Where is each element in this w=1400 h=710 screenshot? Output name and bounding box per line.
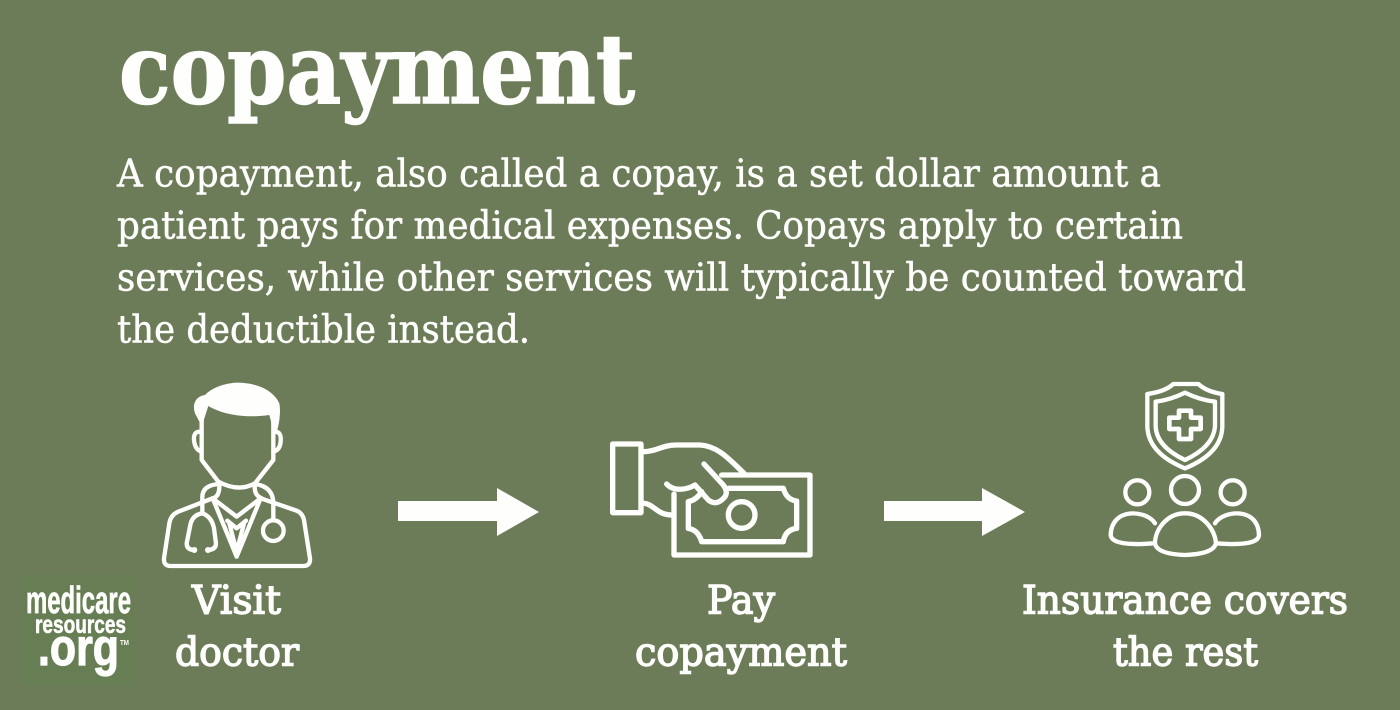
definition text block (116, 152, 1246, 352)
logo: medicareresources.org: .org (38, 619, 119, 677)
icon: hand paying cash (613, 444, 810, 555)
label: visit doctor: Visit (191, 578, 281, 624)
label: visit doctor (175, 578, 299, 676)
definition text block: the deductible instead. (117, 308, 530, 352)
arrow 2 (884, 488, 1025, 536)
icon: shield and people (1111, 384, 1259, 555)
arrow 1 (398, 488, 539, 536)
logo: medicareresources.org: medicare (26, 580, 131, 622)
logo: medicareresources.org: resources (35, 611, 126, 639)
icon: doctor (164, 383, 310, 566)
logo: medicareresources.org: TM (120, 640, 129, 647)
label: pay copayment (635, 578, 847, 676)
label: insurance covers the rest (1022, 578, 1348, 676)
definition text block: patient pays for medical expenses. Copays apply to certain (117, 204, 1183, 248)
label: insurance covers the rest: the rest (1113, 630, 1258, 676)
definition text block: services, while other services will typically be counted toward (117, 256, 1246, 300)
definition text block: A copayment, also called a copay, is a set dollar amount a (116, 152, 1161, 196)
logo: medicareresources.org (22, 575, 134, 685)
label: pay copayment: copayment (635, 630, 847, 676)
label: visit doctor: doctor (175, 630, 299, 676)
label: pay copayment: Pay (707, 578, 775, 624)
title: copayment (119, 13, 635, 126)
label: insurance covers the rest: Insurance covers (1022, 578, 1348, 624)
